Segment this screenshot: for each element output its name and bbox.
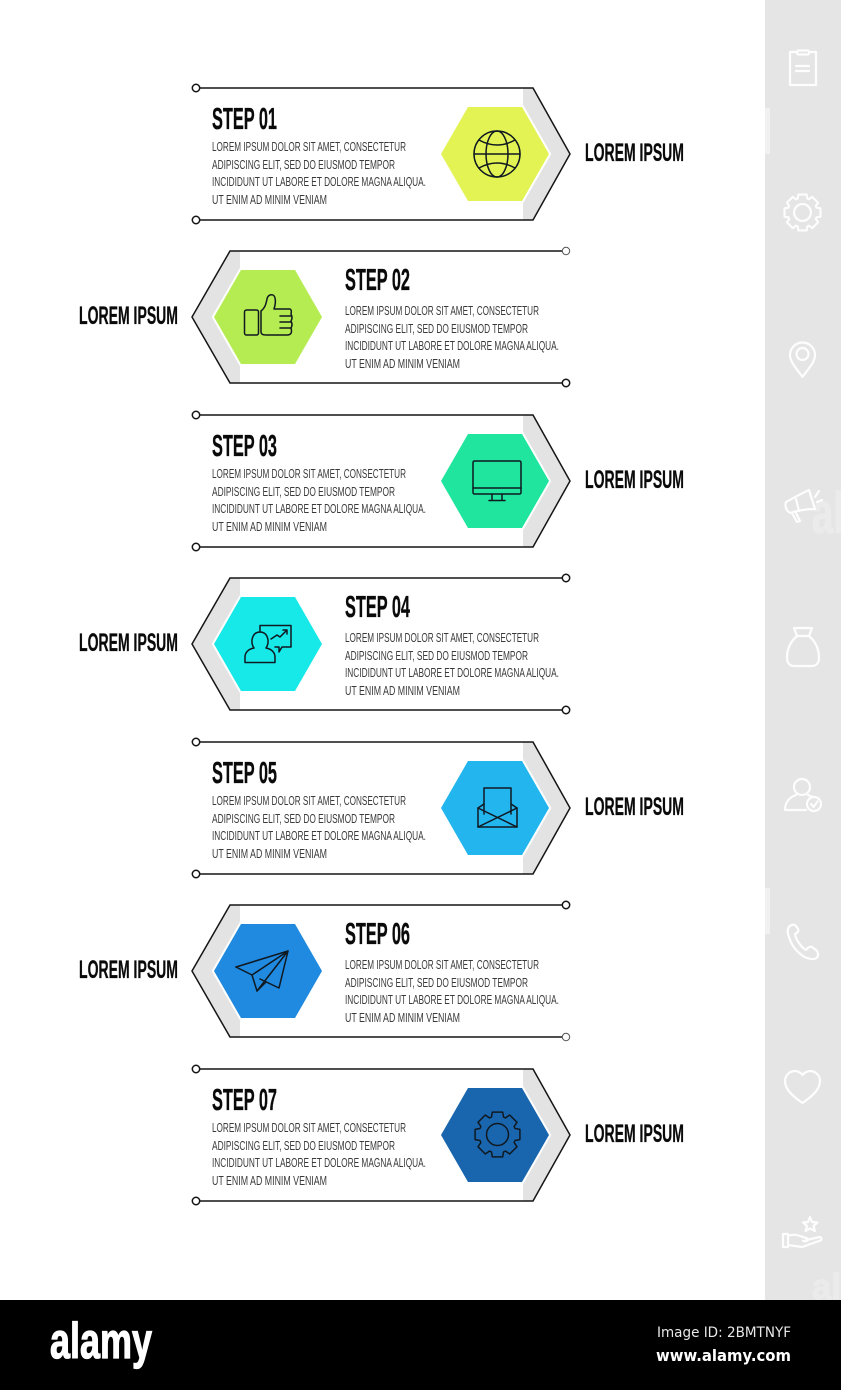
panel: step 05 [192,738,684,878]
hexagon [214,597,322,691]
hexagon [214,270,322,364]
text block [345,957,559,1025]
panel: step 02 [79,247,570,387]
text block: UT ENIM AD MINIM VENIAM [212,846,327,861]
text block: INCIDIDUNT UT LABORE ET DOLORE MAGNA ALIQUA. [345,338,559,353]
text block: INCIDIDUNT UT LABORE ET DOLORE MAGNA ALIQUA. [212,1155,426,1170]
text block: LOREM IPSUM DOLOR SIT AMET, CONSECTETUR [212,139,406,154]
website: www.alamy.com [656,1346,791,1365]
text block: INCIDIDUNT UT LABORE ET DOLORE MAGNA ALIQUA. [212,501,426,516]
text block: INCIDIDUNT UT LABORE ET DOLORE MAGNA ALIQUA. [345,665,559,680]
text block: UT ENIM AD MINIM VENIAM [345,1010,460,1025]
text block: UT ENIM AD MINIM VENIAM [212,192,327,207]
icon: gear [475,1112,520,1157]
text block: ADIPISCING ELIT, SED DO EIUSMOD TEMPOR [212,1138,395,1153]
text block: ADIPISCING ELIT, SED DO EIUSMOD TEMPOR [212,157,395,172]
label: LOREM IPSUM [585,1120,684,1148]
text block [212,793,426,861]
label: LOREM IPSUM [79,629,178,657]
label: LOREM IPSUM [79,956,178,984]
chevron frame [192,574,570,714]
icon: user with check [785,779,821,811]
heading: STEP 06 [345,917,410,951]
text block: UT ENIM AD MINIM VENIAM [345,683,460,698]
logo: alamy: alamy [50,1313,152,1369]
text block: LOREM IPSUM DOLOR SIT AMET, CONSECTETUR [345,630,539,645]
label: LOREM IPSUM [585,793,684,821]
chevron frame [192,247,570,387]
text block: UT ENIM AD MINIM VENIAM [212,519,327,534]
chevron frame [192,738,570,878]
icon: globe [474,131,520,177]
icon: phone [788,925,818,959]
label: LOREM IPSUM [585,466,684,494]
image id: Image ID: 2BMTNYF [657,1325,791,1341]
sidebar background [765,0,841,1300]
chevron frame [192,411,570,551]
icon: thumbs up [244,295,292,335]
icon: gear [785,195,820,230]
text block: LOREM IPSUM DOLOR SIT AMET, CONSECTETUR [345,303,539,318]
text block: LOREM IPSUM DOLOR SIT AMET, CONSECTETUR [212,793,406,808]
text block [212,1120,426,1188]
text block: LOREM IPSUM DOLOR SIT AMET, CONSECTETUR [212,1120,406,1135]
label: LOREM IPSUM [585,139,684,167]
icon: paper plane [236,951,288,991]
chevron frame [192,901,570,1041]
icon: heart [785,1071,820,1103]
icon: bag [787,628,819,666]
icon: location pin [790,342,815,377]
heading: STEP 05 [212,756,277,790]
text block: LOREM IPSUM DOLOR SIT AMET, CONSECTETUR [345,957,539,972]
panel: step 04 [79,574,570,714]
icon: open envelope [478,788,517,827]
chevron frame [192,84,570,224]
text block: ADIPISCING ELIT, SED DO EIUSMOD TEMPOR [345,648,528,663]
icon: monitor [473,461,521,500]
heading: STEP 02 [345,263,410,297]
heading: STEP 03 [212,429,277,463]
text block: INCIDIDUNT UT LABORE ET DOLORE MAGNA ALIQUA. [345,992,559,1007]
text block: ADIPISCING ELIT, SED DO EIUSMOD TEMPOR [212,484,395,499]
text block: UT ENIM AD MINIM VENIAM [345,356,460,371]
text block: ADIPISCING ELIT, SED DO EIUSMOD TEMPOR [212,811,395,826]
icon: hand with star [783,1217,822,1247]
text block: INCIDIDUNT UT LABORE ET DOLORE MAGNA ALIQUA. [212,828,426,843]
text block [212,466,426,534]
heading: STEP 07 [212,1083,277,1117]
text block: LOREM IPSUM DOLOR SIT AMET, CONSECTETUR [212,466,406,481]
panel: step 07 [192,1065,684,1205]
hexagon [441,434,549,528]
text block: ADIPISCING ELIT, SED DO EIUSMOD TEMPOR [345,975,528,990]
text block [345,303,559,371]
label: LOREM IPSUM [79,302,178,330]
panel: sidebar [765,0,841,1307]
icon: megaphone [786,490,822,522]
panel: step 03 [192,411,684,551]
hexagon [441,1088,549,1182]
footer bar [0,1300,841,1390]
icon: presenter with chart [245,626,291,662]
hexagon [441,107,549,201]
heading: STEP 01 [212,102,277,136]
hexagon [441,761,549,855]
chevron frame [192,1065,570,1205]
text block: ADIPISCING ELIT, SED DO EIUSMOD TEMPOR [345,321,528,336]
icon: clipboard [790,50,816,85]
text block: UT ENIM AD MINIM VENIAM [212,1173,327,1188]
text block: INCIDIDUNT UT LABORE ET DOLORE MAGNA ALIQUA. [212,174,426,189]
text block [345,630,559,698]
heading: STEP 04 [345,590,410,624]
text block [212,139,426,207]
hexagon [214,924,322,1018]
panel: step 01 [192,84,684,224]
panel: step 06 [79,901,570,1041]
